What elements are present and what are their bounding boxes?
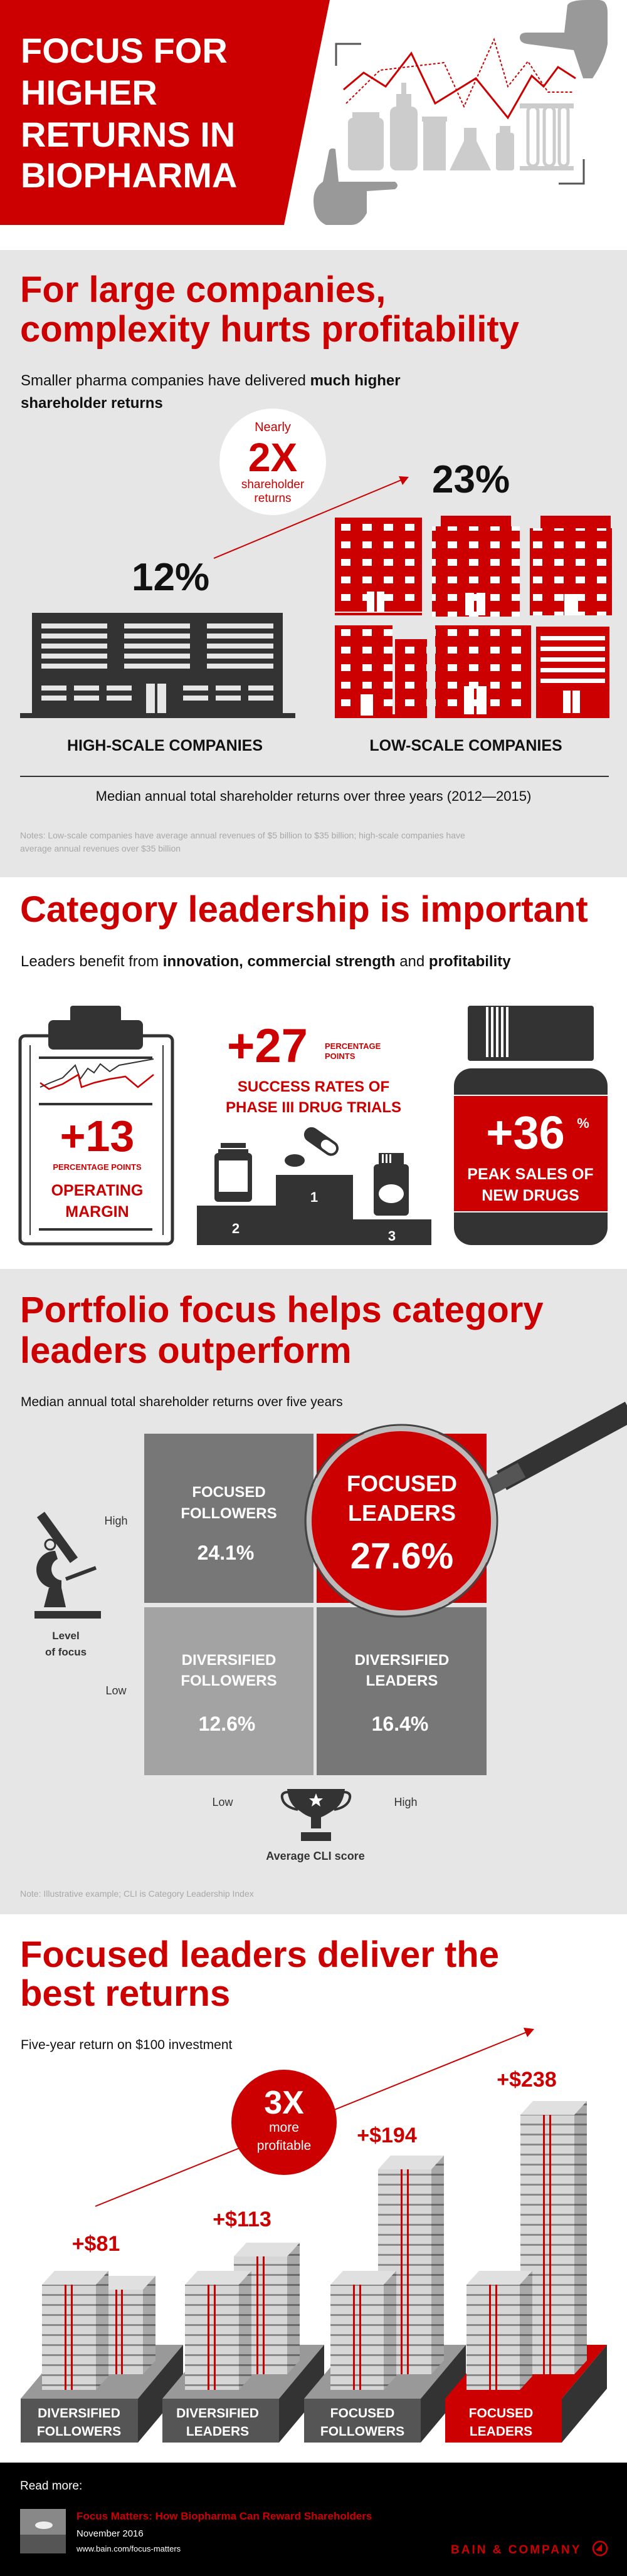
callout: nearly 2X: 2X [248,435,297,480]
footer: read more [20,2480,372,2553]
platforms [21,2345,607,2443]
value labels: returns: +$238 [497,2068,557,2092]
panel: phase III success podium: +27 [227,1019,308,1073]
panel: peak sales bottle: +36 [486,1107,565,1159]
platform labels: FOCUSED [469,2406,533,2421]
value labels: returns: +$194 [357,2124,417,2147]
panel: phase III success podium: 1 [310,1189,318,1205]
subtitle: five years: Median annual total shareholder returns over five years [21,1395,343,1409]
callout: nearly 2X: Nearly [255,420,291,434]
panel: phase III success podium: PHASE III DRUG TRIALS [226,1099,401,1116]
platform labels [37,2406,533,2439]
axis: level of focus with microscope: of focus [45,1646,87,1658]
callout: nearly 2X: shareholder [241,478,305,491]
title banner: RETURNS IN [21,115,235,154]
icon: high-scale building [20,613,295,718]
money stacks: focused leaders [466,2101,587,2390]
quadrant: focused leaders with magnifier: FOCUSED [347,1471,457,1496]
axis: level of focus with microscope: High [104,1515,128,1527]
label: low-scale companies: LOW-SCALE COMPANIES [369,737,562,754]
icon: low-scale buildings [335,516,612,718]
quadrant: diversified leaders: DIVERSIFIED [355,1652,449,1669]
panel: operating margin clipboard: PERCENTAGE POINTS [53,1162,142,1172]
title banner: FOCUS FOR [21,31,228,70]
quadrant: diversified followers: FOLLOWERS [181,1672,277,1689]
value: 23%: 23% [432,458,510,501]
panel: peak sales bottle: PEAK SALES OF [467,1165,594,1183]
heading: focused leaders deliver: Focused leaders deliver the [20,1934,499,1975]
quadrant: diversified leaders [317,1607,487,1775]
callout: nearly 2X: returns [254,492,292,505]
quadrant: focused leaders with magnifier: 27.6% [350,1536,453,1577]
money stacks: diversified leaders [185,2243,300,2390]
note: CLI definition: Note: Illustrative example; CLI is Category Leadership Index [20,1889,254,1899]
subtitle: smaller pharma: Smaller pharma companies have delivered much higher [21,372,401,389]
caption: median returns three years: Median annual total shareholder returns over three years (2012—2015) [96,788,531,804]
heading: portfolio focus: Portfolio focus helps category [20,1290,544,1330]
panel: phase III success podium: 2 [232,1221,240,1236]
panel: operating margin clipboard [20,1006,172,1244]
callout: 3X more profitable: profitable [257,2139,311,2153]
money stacks: diversified followers [42,2271,155,2390]
subtitle: smaller pharma [21,372,401,412]
quadrant: focused leaders with magnifier [305,1411,627,1617]
heading: portfolio focus: leaders outperform [20,1330,352,1371]
label: high-scale companies: HIGH-SCALE COMPANIES [67,737,263,754]
heading: for large companies: For large companies, [20,269,386,310]
heading: category leadership: Category leadership is important [20,889,588,930]
panel: operating margin clipboard: MARGIN [65,1203,129,1221]
callout: 3X more profitable: more [269,2120,299,2135]
quadrant: focused followers: FOLLOWERS [181,1505,277,1522]
footer: read more: November 2016 [76,2528,144,2539]
axis: level of focus with microscope: Low [105,1684,127,1697]
quadrant: focused leaders with magnifier: LEADERS [348,1500,456,1526]
axis: level of focus with microscope: Level [52,1630,80,1642]
quadrant: diversified leaders: LEADERS [366,1672,438,1689]
callout: 3X more profitable: 3X [264,2085,304,2121]
heading: for large companies: complexity hurts profitability [20,309,519,350]
header illustration: hands framing chart and lab bottles [314,0,608,225]
quadrant: diversified followers: 12.6% [199,1713,255,1735]
panel: operating margin clipboard: +13 [60,1112,134,1160]
panel: phase III success podium: 3 [388,1228,396,1244]
axis: average CLI score with trophy: Average CLI score [266,1850,365,1862]
quadrant: focused followers [144,1434,314,1603]
footer: read more: Read more: [20,2480,82,2493]
panel: peak sales bottle: NEW DRUGS [482,1187,579,1204]
platform labels: FOLLOWERS [320,2424,404,2439]
title banner: BIOPHARMA [21,155,237,195]
axis: average CLI score with trophy: Low [212,1796,234,1808]
logo: Bain & Company: BAIN & COMPANY [451,2543,581,2557]
subtitle: leaders benefit: Leaders benefit from innovation, commercial strength and profitability [21,953,511,970]
axis: average CLI score with trophy [212,1789,418,1862]
panel: phase III success podium: PERCENTAGE [325,1041,381,1051]
notes: scale definitions [20,830,465,853]
money stacks: focused followers [330,2156,444,2390]
platform labels: DIVERSIFIED [176,2406,259,2421]
value labels: returns [72,2068,557,2256]
subtitle: smaller pharma: shareholder returns [21,395,163,412]
footer: read more: www.bain.com/focus-matters [76,2544,181,2553]
platform labels: FOLLOWERS [37,2424,121,2439]
quadrant: focused followers: 24.1% [198,1541,254,1564]
axis: average CLI score with trophy: High [394,1796,418,1808]
arrow: rising returns [95,2028,534,2206]
subtitle: five-year return: Five-year return on $100 investment [21,2038,232,2052]
platform labels: FOCUSED [330,2406,394,2421]
quadrant: diversified followers [144,1607,314,1775]
quadrant: focused followers: FOCUSED [192,1484,266,1501]
platform labels: LEADERS [186,2424,249,2439]
platform labels: DIVERSIFIED [38,2406,120,2421]
value labels: returns: +$113 [213,2208,271,2231]
footer: read more: Focus Matters: How Biopharma Can Reward Shareholders [76,2510,372,2522]
heading: portfolio focus [20,1290,544,1371]
heading: for large companies [20,269,519,350]
title banner [0,0,330,225]
callout: nearly 2X [219,409,326,515]
panel: operating margin clipboard: OPERATING [51,1182,143,1199]
value labels: returns: +$81 [72,2232,120,2256]
heading: focused leaders deliver: best returns [20,1973,230,2014]
heading: focused leaders deliver [20,1934,499,2014]
quadrant: diversified followers: DIVERSIFIED [182,1652,276,1669]
quadrant: diversified leaders: 16.4% [372,1713,428,1735]
panel: phase III success podium [197,1019,431,1245]
panel: peak sales bottle [454,1006,608,1245]
notes: scale definitions: Notes: Low-scale companies have average annual revenues of $5 billion to $35 billion; high-scale companies have [20,830,465,840]
platform labels: LEADERS [470,2424,532,2439]
arrow: 12% to 23% [214,476,409,558]
axis: level of focus with microscope [34,1515,128,1697]
panel: phase III success podium: SUCCESS RATES OF [238,1078,389,1095]
value: 12%: 12% [132,556,209,599]
notes: scale definitions: average annual revenues over $35 billion [20,843,181,853]
panel: peak sales bottle: % [577,1115,589,1131]
callout: 3X more profitable [231,2070,337,2175]
panel: phase III success podium: POINTS [325,1051,356,1061]
title banner: HIGHER [21,73,157,112]
